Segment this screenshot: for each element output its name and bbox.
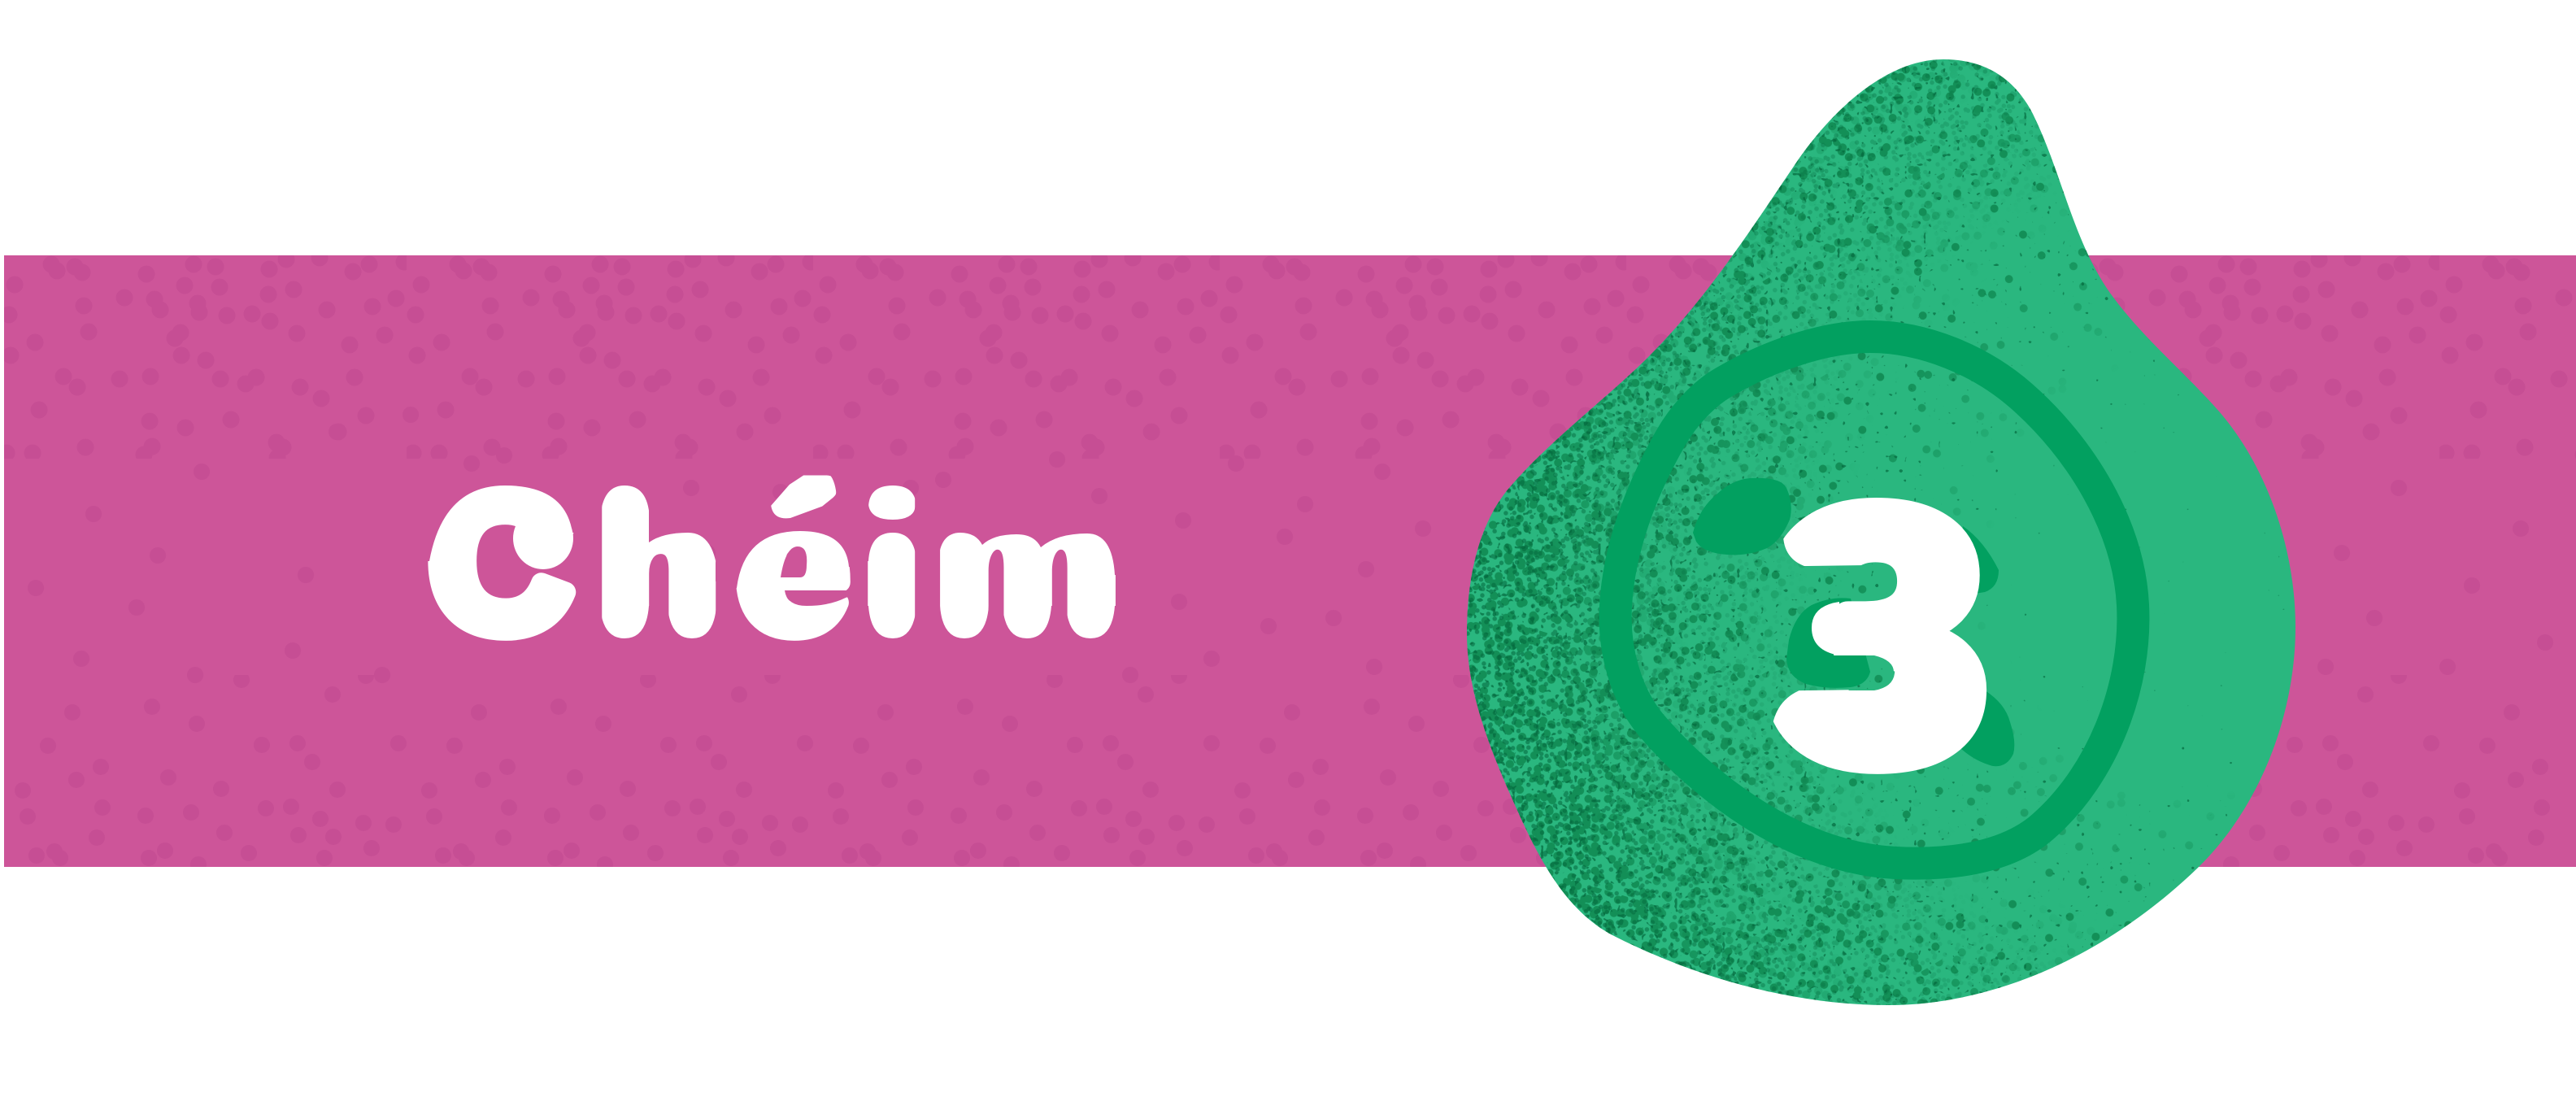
- banner dots: middle band: [36, 415, 2545, 675]
- inner ring: [1616, 337, 2133, 864]
- blotch: upper right: [1952, 526, 1999, 594]
- blotch: lower right: [1960, 690, 2014, 766]
- heading: Chéim: m: [936, 444, 1118, 673]
- blotch: upper left: [1693, 478, 1791, 555]
- badge: green blob with number: [1447, 33, 2317, 1025]
- heading: Chéim: Chéi: [430, 452, 919, 670]
- banner dots: bottom band: [4, 675, 2576, 867]
- heading: Chéim: [428, 475, 1116, 641]
- banner dots: top band: [4, 255, 2576, 459]
- blotch: centre: [1786, 598, 1870, 688]
- pale dots spilling past the banner edge: [0, 867, 2576, 873]
- speckle texture: [1467, 59, 2285, 1005]
- panel: pink banner: [0, 255, 2576, 873]
- number 3: 3: [1770, 438, 1986, 832]
- number 3: [1773, 498, 1987, 774]
- blob shape: [1467, 59, 2295, 1005]
